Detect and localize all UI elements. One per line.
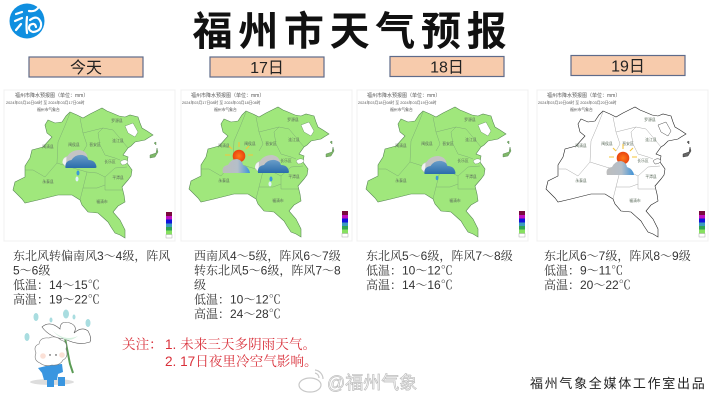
- credit: 福州气象全媒体工作室出品: [530, 376, 706, 391]
- panel: 17th rainfall map: 长乐区: [280, 158, 292, 163]
- panel: 17th rainfall map: 闽侯县: [244, 141, 256, 146]
- callout: notes: 2. 17日夜里冷空气影响。: [165, 354, 318, 369]
- panel: today rainfall map: 长乐区: [104, 159, 116, 164]
- icon: rain cloud: [255, 155, 289, 186]
- text: today forecast: 5～6级: [13, 264, 50, 278]
- text: 17th forecast: 高温：24～28℃: [194, 306, 281, 321]
- panel: today rainfall map: 连江县: [112, 138, 124, 143]
- panel: 19th rainfall map: 闽侯县: [601, 141, 613, 146]
- panel: 17th rainfall map: 罗源县: [287, 117, 299, 122]
- heading: 18th: [390, 56, 504, 76]
- logo: Fuzhou weather badge: [10, 4, 44, 38]
- text: 19th forecast: 高温：20～22℃: [544, 277, 631, 292]
- panel: 17th rainfall map: 平潭县: [288, 174, 300, 179]
- panel: today rainfall map: 闽清县: [42, 144, 54, 149]
- text: today forecast: 高温：19～22℃: [13, 292, 100, 306]
- panel: 18th rainfall map: 连江县: [465, 137, 477, 142]
- heading: 17th: 17日: [250, 60, 284, 77]
- panel: 18th rainfall map: 福清市: [449, 198, 461, 203]
- heading: today: 今天: [70, 59, 102, 77]
- panel: 18th rainfall map: 福州市气象台: [390, 107, 413, 112]
- panel: today rainfall map: 永泰县: [42, 179, 54, 184]
- panel: 18th rainfall map: 2024年03月18日08时 至 2024年03月19日08时: [358, 100, 437, 105]
- heading: 19th: [571, 56, 685, 76]
- panel: 17th rainfall map: 永泰县: [218, 178, 230, 183]
- text: 18th forecast: 东北风5～6级，阵风7～8级: [366, 249, 513, 263]
- icon: sun and cloud: [223, 142, 253, 173]
- panel: 19th rainfall map: [537, 90, 708, 241]
- text: today forecast: 低温：14～15℃: [13, 278, 100, 292]
- panel: today rainfall map: 2024年03月16日08时 至 2024年03月17日08时: [6, 100, 85, 105]
- callout: notes: 关注：: [122, 337, 163, 352]
- text: today forecast: 东北风转偏南风3～4级，阵风: [13, 248, 170, 263]
- panel: today rainfall map: 福州市气象台: [37, 107, 60, 112]
- panel: 18th rainfall map: 永泰县: [395, 178, 407, 183]
- panel: 18th rainfall map: 闽侯县: [421, 141, 433, 146]
- panel: 19th rainfall map: 罗源县: [644, 117, 656, 122]
- text: 17th forecast: 西南风4～5级，阵风6～7级: [194, 248, 341, 263]
- panel: 18th rainfall map: 平潭县: [465, 174, 477, 179]
- panel: 17th rainfall map: 2024年03月17日08时 至 2024年03月18日08时: [182, 100, 261, 105]
- heading: 18th: 18日: [430, 60, 464, 76]
- panel: 18th rainfall map: 晋安区: [442, 141, 454, 146]
- panel: 17th rainfall map: [181, 90, 352, 241]
- panel: 19th rainfall map: 长乐区: [637, 158, 649, 163]
- text: 18th forecast: [366, 249, 513, 292]
- panel: 19th rainfall map: 福州市降水预报图（单位：mm）: [547, 92, 620, 99]
- text: 17th forecast: [194, 248, 341, 321]
- panel: 18th rainfall map: 闽清县: [395, 143, 407, 148]
- panel: 17th rainfall map: 晋安区: [265, 141, 277, 146]
- icon: sun and cloud: [607, 144, 637, 175]
- panel: 17th rainfall map: 福清市: [272, 198, 284, 203]
- panel: 19th rainfall map: 2024年03月19日08时 至 2024年03月20日08时: [538, 100, 617, 105]
- panel: 19th rainfall map: 福州市气象台: [570, 107, 593, 112]
- icon: rain cloud: [62, 150, 96, 182]
- panel: 18th rainfall map: [357, 90, 528, 241]
- text: 18th forecast: 低温：10～12℃: [366, 264, 453, 278]
- panel: today rainfall map: 平潭县: [112, 175, 124, 180]
- panel: 19th rainfall map: 连江县: [645, 137, 657, 142]
- panel: 17th rainfall map: 连江县: [288, 137, 300, 142]
- panel: 19th rainfall map: 晋安区: [622, 141, 634, 146]
- panel: today rainfall map: [4, 90, 175, 241]
- icon: rain cloud: [422, 156, 456, 180]
- heading: today: [29, 57, 143, 77]
- text: 17th forecast: 转东北风5～6级，阵风7～8: [194, 262, 341, 278]
- panel: 18th rainfall map: 长乐区: [457, 158, 469, 163]
- panel: 18th rainfall map: 罗源县: [464, 117, 476, 122]
- panel: today rainfall map: 福清市: [96, 199, 108, 204]
- panel: 17th rainfall map: 闽清县: [218, 143, 230, 148]
- watermark: weibo: [299, 370, 417, 393]
- text: 18th forecast: 高温：14～16℃: [366, 277, 453, 292]
- text: today forecast: [13, 248, 170, 306]
- heading: 17th: [210, 57, 324, 77]
- panel: today rainfall map: 晋安区: [89, 142, 101, 147]
- watermark: weibo: @福州气象: [327, 373, 417, 393]
- panel: 19th rainfall map: 平潭县: [645, 174, 657, 179]
- heading: 19th: 19日: [611, 58, 645, 76]
- text: 19th forecast: [544, 249, 691, 292]
- text: 19th forecast: 低温：9～11℃: [544, 264, 623, 278]
- callout: notes: 1. 未来三天多阴雨天气。: [165, 336, 316, 352]
- title: 福州市天气预报: [192, 10, 512, 54]
- panel: today rainfall map: 福州市降水预报图（单位：mm）: [15, 92, 88, 99]
- panel: 19th rainfall map: 福清市: [629, 198, 641, 203]
- callout: notes: [122, 336, 318, 369]
- text: 17th forecast: 级: [194, 278, 206, 292]
- mascot: flower character in the rain: [24, 310, 91, 387]
- panel: today rainfall map: 闽侯县: [68, 142, 80, 147]
- panel: 19th rainfall map: 闽清县: [575, 143, 587, 148]
- text: 17th forecast: 低温：10～12℃: [194, 292, 281, 306]
- panel: 17th rainfall map: 福州市降水预报图（单位：mm）: [191, 92, 264, 99]
- panel: 17th rainfall map: 福州市气象台: [214, 107, 237, 112]
- panel: today rainfall map: 罗源县: [111, 118, 123, 123]
- panel: 19th rainfall map: 永泰县: [575, 178, 587, 183]
- text: 19th forecast: 东北风6～7级，阵风8～9级: [544, 249, 691, 263]
- panel: 18th rainfall map: 福州市降水预报图（单位：mm）: [367, 92, 440, 99]
